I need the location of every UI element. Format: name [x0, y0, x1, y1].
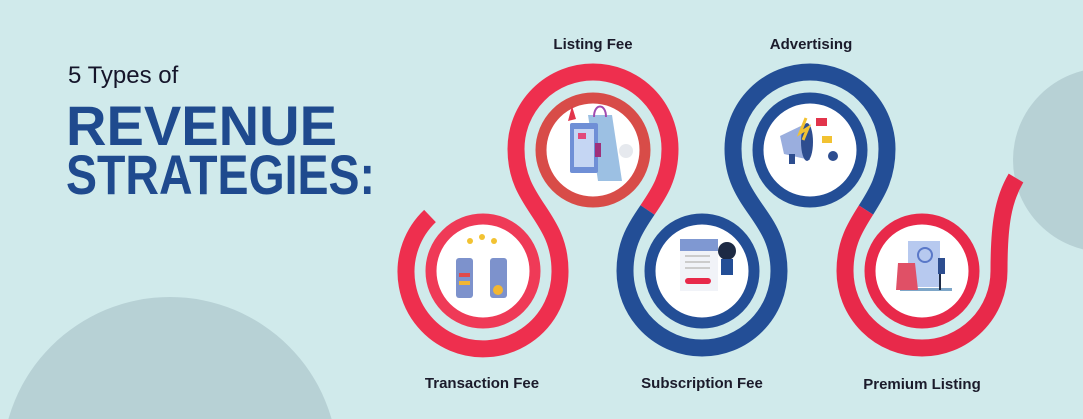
label: listing fee: Listing Fee [553, 36, 633, 53]
icon: subscribe form [680, 239, 736, 291]
panel: advertising [758, 36, 862, 202]
label: transaction fee: Transaction Fee [425, 375, 539, 392]
panel: premium listing [863, 219, 981, 393]
icon: shopping bag with clipboard [568, 106, 633, 181]
panel: listing fee [541, 36, 645, 202]
title: 5 Types of [68, 62, 179, 89]
title: REVENUE [66, 94, 337, 157]
track: s-curve [406, 72, 1016, 349]
panel: subscription fee [641, 219, 763, 392]
icon: megaphone [780, 118, 838, 164]
panel: transaction fee [425, 219, 539, 392]
icon: cart screen with bag [896, 241, 952, 291]
title [66, 62, 375, 206]
icon: phones with coins [456, 234, 507, 298]
title: STRATEGIES: [66, 143, 375, 206]
label: premium listing: Premium Listing [863, 376, 981, 393]
label: advertising: Advertising [770, 36, 852, 53]
label: subscription fee: Subscription Fee [641, 375, 763, 392]
